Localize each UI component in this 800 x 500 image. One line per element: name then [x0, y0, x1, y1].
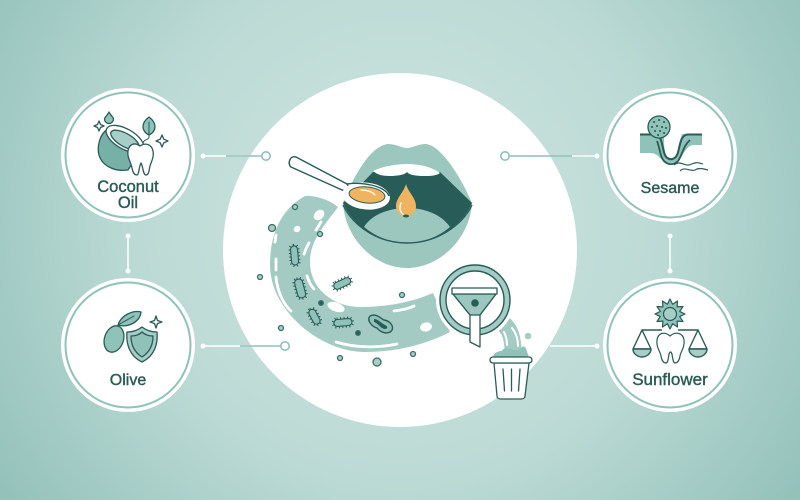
label: Coconut Oil: Coconut — [97, 178, 159, 196]
icon: coconut and tooth — [94, 112, 168, 175]
icon: funnel — [452, 288, 497, 347]
drain flow — [497, 322, 531, 352]
connector: olive to centre — [200, 342, 289, 350]
filter ring — [436, 261, 514, 347]
oil stream — [270, 196, 450, 352]
teeth — [373, 164, 440, 176]
bacteria — [289, 245, 393, 333]
mouth interior — [343, 172, 472, 243]
spoon — [289, 157, 391, 212]
panel: olive — [61, 278, 195, 412]
oil drop — [396, 184, 416, 218]
label: Coconut Oil — [97, 178, 159, 212]
floating particles — [258, 204, 416, 366]
label: Olive: Olive — [110, 372, 146, 389]
connector: sesame to sunflower — [668, 234, 672, 274]
lower lip line — [343, 205, 472, 243]
label: Sunflower: Sunflower — [632, 370, 708, 389]
central white circle — [223, 73, 577, 427]
label: Sesame: Sesame — [641, 180, 699, 197]
panel: sunflower — [603, 278, 737, 412]
connector: sunflower to centre — [550, 344, 600, 348]
oil in spoon — [348, 185, 386, 205]
lips — [343, 144, 472, 268]
icon: sunflower, scales and tooth — [633, 299, 707, 363]
waste — [493, 347, 528, 357]
connector: coconut to centre — [200, 152, 270, 160]
label: Coconut Oil: Oil — [118, 194, 138, 212]
stream highlights — [275, 222, 414, 347]
mouth — [343, 144, 472, 268]
icon: olive and shield — [101, 312, 162, 362]
panel: coconut oil — [61, 88, 195, 222]
connector: coconut to olive — [126, 234, 130, 274]
tongue — [364, 208, 450, 243]
panel: sesame — [603, 88, 737, 222]
trash bin — [490, 347, 532, 399]
icon: sesame and gum — [640, 116, 708, 171]
connector: sesame to centre — [501, 152, 600, 160]
